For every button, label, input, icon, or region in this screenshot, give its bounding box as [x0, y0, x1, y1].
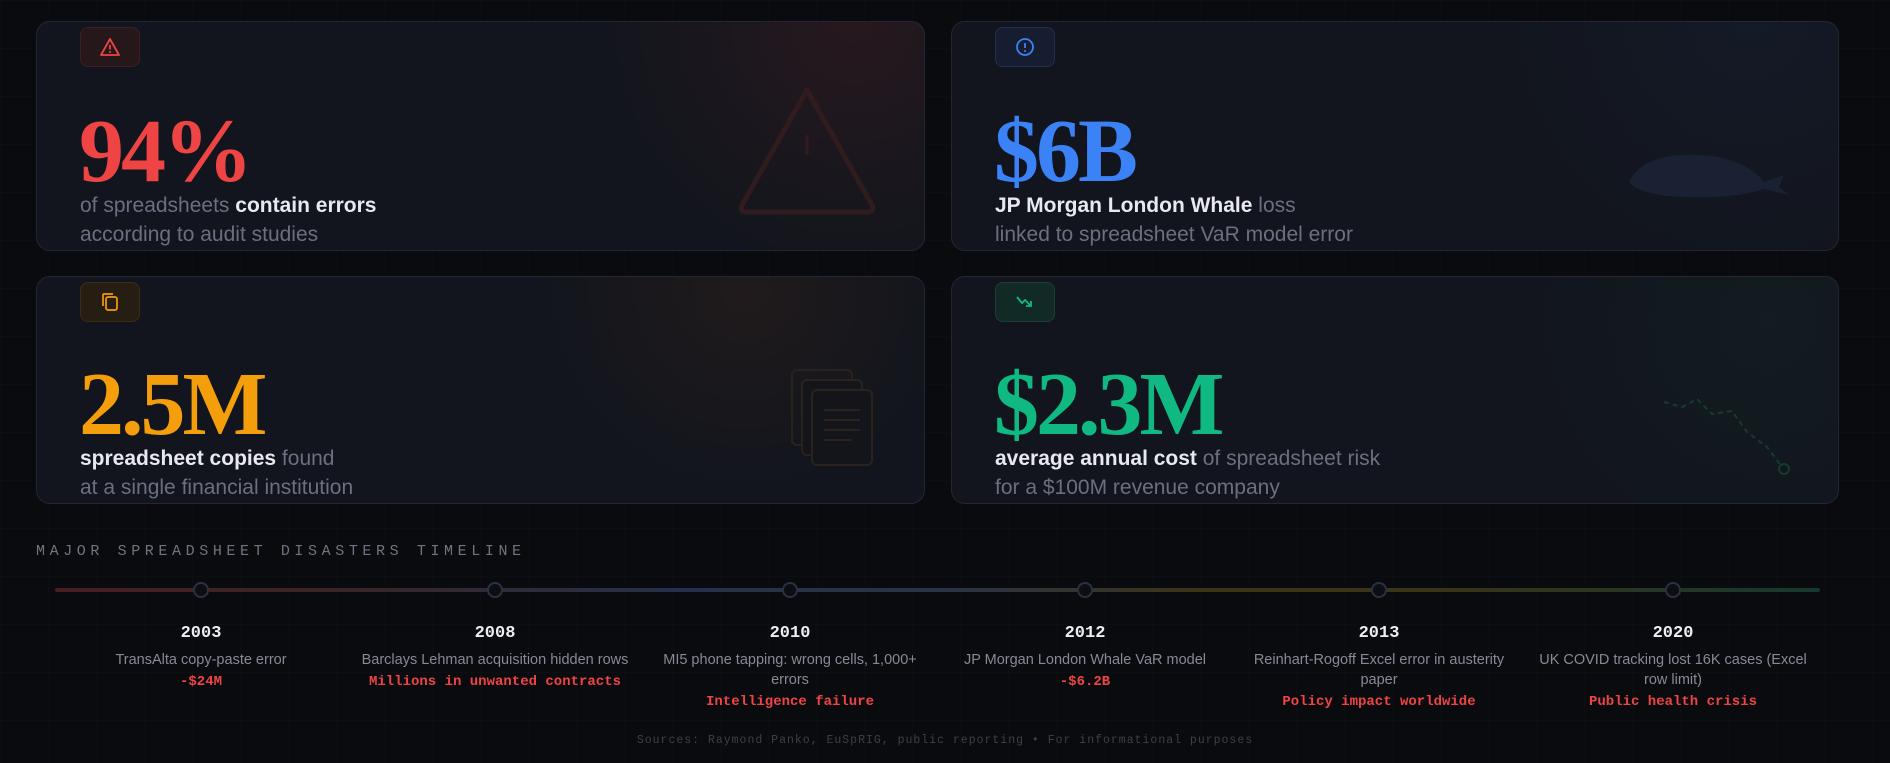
event: 2008: [362, 624, 628, 690]
stat: $6B: $6B: [994, 102, 1135, 201]
text: description: average annual cost of spreadsheet risk: [995, 447, 1380, 470]
event: 2013: 2013: [1359, 624, 1399, 643]
event: 2008: Millions in unwanted contracts: [369, 674, 621, 690]
card: $2.3M cost: [951, 276, 1839, 504]
event: 2013: [1254, 624, 1504, 710]
event: 2012: 2012: [1065, 624, 1105, 643]
event: 2003: -$24M: [180, 674, 222, 690]
text: description: [80, 194, 376, 246]
text: description: linked to spreadsheet VaR model error: [995, 223, 1353, 246]
text: description: at a single financial institution: [80, 476, 353, 499]
icon: decorative warning triangle: [738, 88, 876, 214]
text: description: [995, 447, 1380, 499]
event: 2020: UK COVID tracking lost 16K cases (Excel row limit): [1539, 652, 1807, 688]
event: 2008: 2008: [475, 624, 515, 643]
event: 2010: [663, 624, 917, 710]
event: 2013: Reinhart-Rogoff Excel error in austerity paper: [1254, 652, 1504, 688]
icon: decorative declining line: [1664, 398, 1790, 475]
text: description: of spreadsheets contain errors: [80, 194, 376, 217]
text: description: JP Morgan London Whale loss: [995, 194, 1296, 217]
icon: warning: [80, 27, 140, 67]
stat: 94%: 94%: [79, 102, 250, 201]
timeline line: [55, 588, 1820, 592]
card: $6B London Whale: [951, 21, 1839, 251]
event: 2020: Public health crisis: [1589, 694, 1757, 710]
text: description: [80, 447, 353, 499]
icon: decorative whale: [1629, 155, 1788, 198]
event: 2010: Intelligence failure: [706, 694, 874, 710]
icon: decorative documents: [791, 369, 873, 466]
event: 2020: [1539, 624, 1807, 710]
event: 2013: Policy impact worldwide: [1282, 694, 1476, 710]
event: 2003: 2003: [181, 624, 221, 643]
event: 2010: MI5 phone tapping: wrong cells, 1,000+ errors: [663, 652, 917, 688]
event: 2012: -$6.2B: [1060, 674, 1110, 690]
card: 94% errors: [36, 21, 925, 251]
event: 2003: TransAlta copy-paste error: [115, 652, 287, 668]
stat: 2.5M: 2.5M: [79, 355, 264, 454]
icon: info: [995, 27, 1055, 67]
stat: $2.3M: $2.3M: [994, 355, 1221, 454]
icon: copies: [80, 282, 140, 322]
event: 2010: 2010: [770, 624, 810, 643]
event: 2003: [115, 624, 287, 690]
text: description: for a $100M revenue company: [995, 476, 1280, 499]
text: description: according to audit studies: [80, 223, 318, 246]
icon: trend down: [995, 282, 1055, 322]
text: description: spreadsheet copies found: [80, 447, 334, 470]
footer: sources: Sources: Raymond Panko, EuSpRIG, public reporting • For informational purposes: [637, 734, 1253, 747]
heading: timeline title: MAJOR SPREADSHEET DISASTERS TIMELINE: [36, 543, 526, 560]
event: 2012: [964, 624, 1206, 690]
event: 2020: 2020: [1653, 624, 1693, 643]
event: 2012: JP Morgan London Whale VaR model: [964, 652, 1206, 668]
timeline nodes: [193, 582, 1681, 598]
event: 2008: Barclays Lehman acquisition hidden rows: [362, 652, 628, 668]
text: description: [995, 194, 1353, 246]
card: 2.5M copies: [36, 276, 925, 504]
